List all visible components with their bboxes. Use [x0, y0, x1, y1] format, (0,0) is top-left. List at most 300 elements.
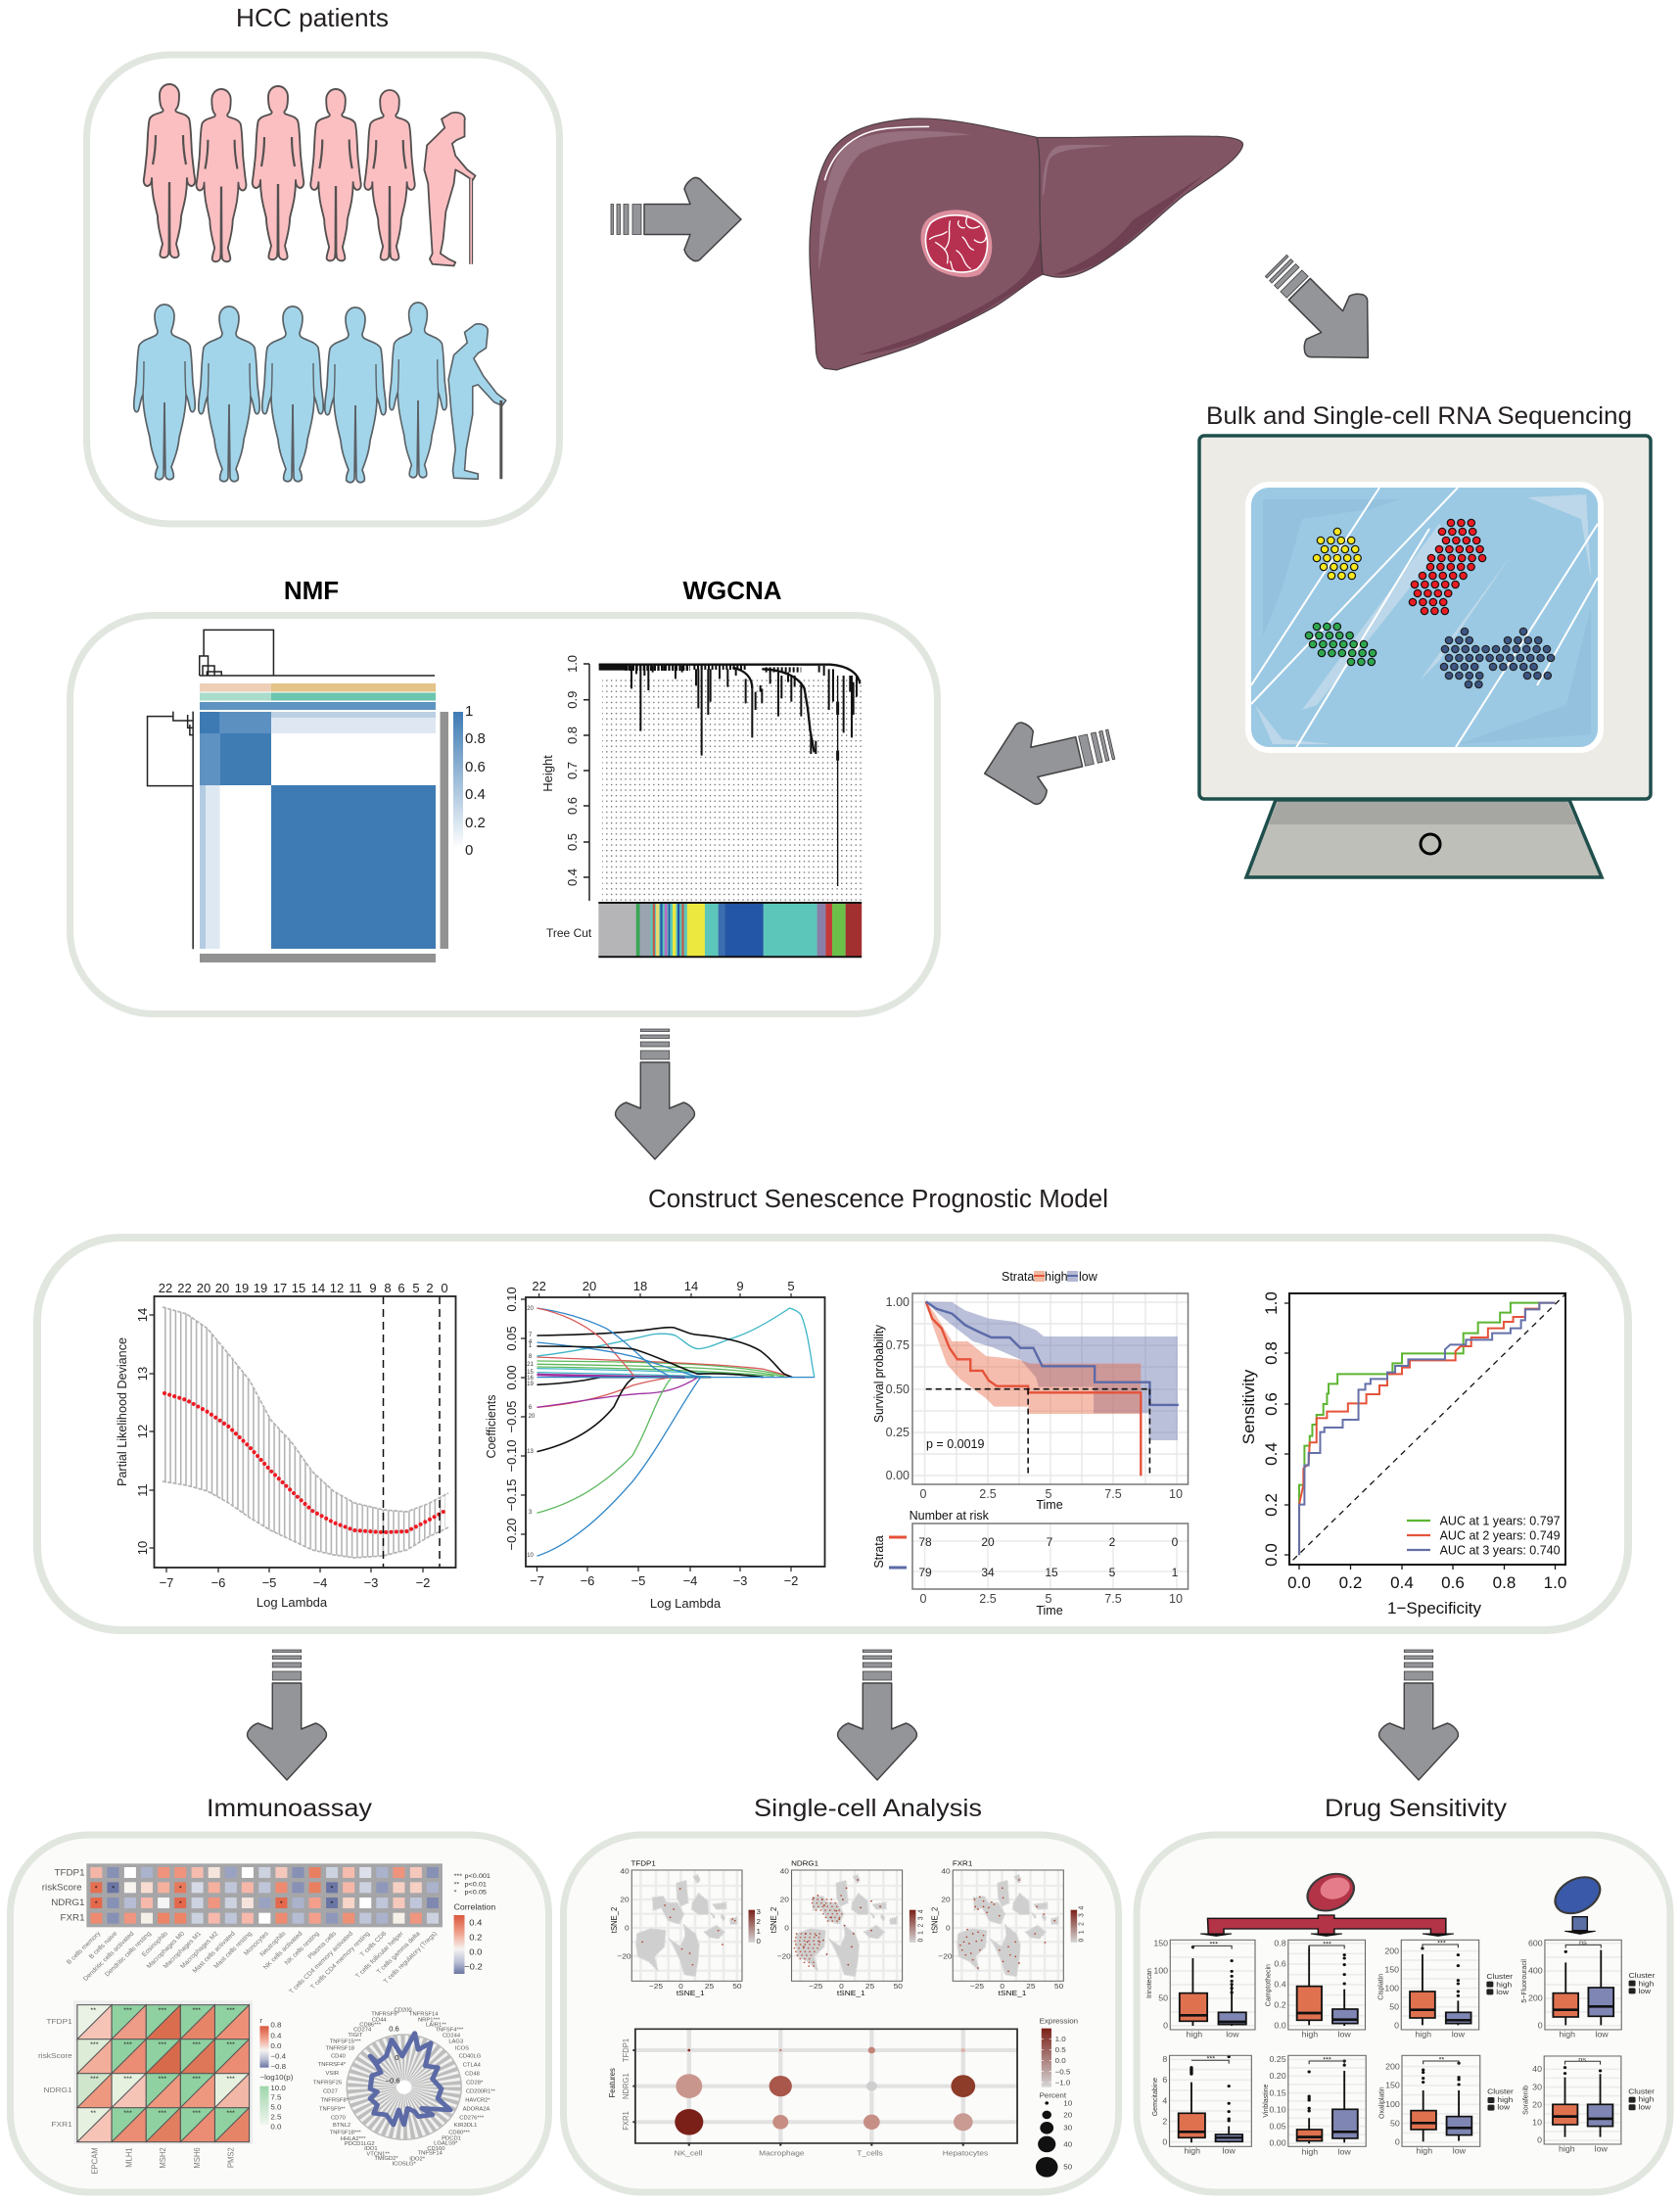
chart: immune checkpoint radar: 0.6 [389, 2025, 399, 2034]
chart: lasso coefficients: 0.00 [504, 1365, 519, 1390]
chart: partial likelihood deviance: −7 [160, 1575, 173, 1590]
chart: tSNE NDRG1: 4 [917, 1909, 924, 1913]
chart: Cisplatin boxplot: 100 [1384, 1984, 1399, 1992]
chart: tSNE NDRG1: 25 [865, 1982, 875, 1991]
legend: AUC values [1407, 1514, 1561, 1557]
chart: partial likelihood deviance: 12 [135, 1425, 150, 1438]
table: number at risk: 20 [981, 1535, 995, 1549]
chart: dot plot of features by cell type: NK_cell [675, 2149, 703, 2157]
chart: Camptothecin boxplot: high [1302, 2030, 1319, 2039]
chart: correlation triangle grid: TFDP1 [46, 2017, 72, 2026]
legend: r and -log10(p): 0.0 [270, 2123, 281, 2131]
chart: Sorafenib boxplot: 20 [1532, 2100, 1542, 2109]
chart: lasso coefficients: 13 [527, 1449, 534, 1455]
chart: Camptothecin boxplot: 0.6 [1274, 1959, 1286, 1969]
chart: Sorafenib boxplot: 40 [1532, 2064, 1542, 2074]
heading: Immunoassay: Immunoassay [207, 1795, 373, 1822]
legend: cluster: Cluster [1487, 2087, 1514, 2096]
chart: Kaplan-Meier survival: 0 [920, 1487, 927, 1501]
chart: ROC curves: 0.8 [1493, 1573, 1516, 1592]
chart: Oxaliplatin boxplot: 150 [1385, 2081, 1400, 2090]
chart: correlation triangle grid: *** [226, 2041, 235, 2048]
chart: immune cell correlation heatmap: T cells CD8 [359, 1931, 389, 1958]
chart: 5-Fluorouracil boxplot [1519, 1939, 1621, 2039]
chart: tSNE TFDP1: 1 [757, 1927, 761, 1936]
chart: partial likelihood deviance: −4 [313, 1575, 327, 1590]
chart: immune checkpoint radar: LAIR1** [426, 2022, 447, 2028]
chart: immune cell correlation heatmap: T cells CD4 memory activated [288, 1931, 354, 1995]
chart: 5-Fluorouracil boxplot: 0 [1538, 2021, 1543, 2031]
chart: lasso coefficients: 1 [529, 1343, 533, 1349]
chart: immune checkpoint radar: CD40 [331, 2054, 346, 2060]
chart: Gemcitabine boxplot: high [1184, 2146, 1200, 2155]
chart: 5-Fluorouracil boxplot: 600 [1528, 1939, 1543, 1947]
legend: significance and correlation: 0.2 [469, 1933, 482, 1942]
chart: Oxaliplatin boxplot: Oxaliplatin [1377, 2086, 1386, 2119]
chart: Kaplan-Meier survival: 0.25 [886, 1426, 910, 1439]
chart: tSNE TFDP1: 50 [732, 1982, 742, 1991]
chart: tSNE TFDP1 [610, 1859, 761, 1997]
chart: Kaplan-Meier survival: 0.50 [886, 1383, 910, 1396]
panel: NMF and WGCNA [70, 615, 938, 1014]
chart: immune checkpoint radar: CD276*** [459, 2115, 485, 2121]
chart: Cisplatin boxplot: 150 [1384, 1965, 1399, 1974]
chart: Cisplatin boxplot [1376, 1940, 1479, 2039]
chart: dot plot of features by cell type: FXR1 [622, 2111, 630, 2131]
chart: immune cell correlation heatmap: T cells CD4 memory resting [309, 1931, 372, 1991]
chart: Vinblastine boxplot: 0.20 [1269, 2071, 1286, 2081]
chart: Kaplan-Meier survival: 1.00 [886, 1295, 910, 1309]
chart: NMF consensus heatmap [148, 630, 486, 962]
chart: lasso coefficients: −4 [683, 1573, 697, 1588]
male patients row [134, 303, 506, 483]
chart: tSNE FXR1: 2 [1078, 1922, 1085, 1926]
chart: Camptothecin boxplot: 0.2 [1274, 2000, 1286, 2010]
chart: lasso coefficients: −3 [733, 1573, 747, 1588]
legend: significance and correlation: Correlation [454, 1902, 496, 1912]
chart: Sorafenib boxplot: high [1559, 2144, 1575, 2153]
chart: Gemcitabine boxplot: 8 [1162, 2054, 1168, 2064]
chart: 5-Fluorouracil boxplot: 5−Fluorouracil [1519, 1959, 1528, 2003]
chart: Kaplan-Meier survival: 2.5 [979, 1487, 997, 1501]
chart: immune cell correlation heatmap: Macrophages M1 [163, 1931, 204, 1970]
chart: immune checkpoint radar: VTCN1** [366, 2151, 391, 2157]
chart: partial likelihood deviance: 0 [441, 1281, 448, 1295]
legend: cluster [1487, 2087, 1514, 2112]
legend: cluster [1628, 2087, 1655, 2111]
chart: WGCNA dendrogram [540, 655, 862, 901]
legend: strata: low [1079, 1270, 1098, 1284]
chart: partial likelihood deviance [115, 1281, 456, 1610]
chart: immune checkpoint radar: CD80*** [448, 2131, 471, 2136]
chart: Gemcitabine boxplot: 6 [1162, 2075, 1168, 2085]
chart: lasso coefficients: −0.15 [504, 1479, 519, 1511]
chart: immune checkpoint radar: TNFRSF4* [318, 2062, 347, 2068]
chart: immune checkpoint radar: CD160 [427, 2146, 444, 2152]
title: Bulk and Single-cell RNA Sequencing: Bulk and Single-cell RNA Sequencing [1206, 402, 1632, 430]
arrow: to drug sensitivity [1379, 1650, 1458, 1780]
chart: immune checkpoint radar: CD48 [465, 2071, 480, 2077]
legend: cluster: high [1639, 1980, 1654, 1988]
chart: immune checkpoint radar: HHLA2*** [341, 2136, 366, 2142]
chart: tSNE NDRG1 [770, 1859, 924, 1997]
chart: lasso coefficients [485, 1279, 824, 1611]
legend: strata: high [1045, 1270, 1068, 1284]
chart: correlation triangle grid: *** [90, 2076, 99, 2083]
chart: dot plot of features by cell type: Macrophage [759, 2149, 805, 2157]
legend: r and -log10(p): 0.4 [270, 2032, 282, 2039]
legend: cluster: Cluster [1629, 1971, 1656, 1980]
chart: partial likelihood deviance: −3 [364, 1575, 378, 1590]
chart: Camptothecin boxplot: low [1338, 2030, 1352, 2039]
chart: tSNE NDRG1: 2 [917, 1924, 924, 1928]
chart: lasso coefficients: 19 [527, 1382, 534, 1387]
chart: partial likelihood deviance: 15 [292, 1281, 305, 1295]
table: number at risk: 79 [918, 1566, 932, 1579]
chart: immune checkpoint radar: CD28* [466, 2080, 484, 2086]
chart: Camptothecin boxplot: 0.8 [1274, 1939, 1286, 1947]
chart: NMF consensus heatmap: 1 [465, 703, 473, 720]
green cell cluster [1309, 627, 1381, 662]
legend: significance and correlation [454, 1873, 496, 1974]
chart: Vinblastine boxplot: *** [1323, 2057, 1331, 2063]
chart: correlation triangle grid: *** [192, 2007, 201, 2014]
table: number at risk: 2 [1109, 1535, 1116, 1549]
table: number at risk: 10 [1169, 1592, 1183, 1606]
chart: WGCNA tree cut colour strip: Tree Cut [546, 926, 592, 940]
panel: prognostic model [37, 1238, 1628, 1630]
chart: immune checkpoint radar: CD27 [323, 2088, 338, 2094]
chart: lasso coefficients: 7 [529, 1333, 533, 1338]
chart: immune checkpoint radar: TNFSF9** [319, 2107, 346, 2113]
chart: partial likelihood deviance: −5 [262, 1575, 276, 1590]
chart: correlation triangle grid: *** [192, 2110, 201, 2117]
chart: correlation triangle grid: MSH6 [193, 2147, 202, 2169]
chart: dot plot of features by cell type: Hepatocytes [943, 2149, 988, 2157]
legend: expression and percent: 0.5 [1055, 2045, 1066, 2054]
chart: immune checkpoint radar: TNFRSF14 [409, 2012, 438, 2018]
icon: low-risk blue cell with arrow [1548, 1870, 1608, 1934]
chart: Sorafenib boxplot: Sorafenib [1520, 2086, 1529, 2115]
chart: WGCNA dendrogram: Height [540, 755, 555, 792]
chart: 5-Fluorouracil boxplot: 200 [1528, 1993, 1543, 2003]
chart: partial likelihood deviance: 20 [215, 1281, 229, 1295]
chart: Gemcitabine boxplot: Gemcitabine [1150, 2078, 1159, 2116]
chart: WGCNA dendrogram: 0.7 [565, 762, 580, 779]
chart: immune cell correlation heatmap: Mast cells resting [212, 1931, 254, 1970]
chart: lasso coefficients: Coefficients [485, 1394, 498, 1459]
chart: tSNE NDRG1: 0 [917, 1939, 924, 1943]
chart: partial likelihood deviance: 14 [311, 1281, 325, 1295]
legend: cluster: low [1496, 1988, 1509, 1996]
chart: dot plot of features by cell type [608, 2017, 1078, 2178]
chart: immune cell correlation heatmap: T cells follicular helper [354, 1930, 405, 1980]
chart: lasso coefficients: −0.10 [504, 1440, 519, 1472]
chart: tSNE FXR1: tSNE_1 [999, 1989, 1027, 1997]
chart: immune checkpoint radar: −0.6 [386, 2077, 400, 2086]
chart: ROC curves [1239, 1291, 1566, 1617]
chart: ROC curves: 0.6 [1262, 1392, 1281, 1416]
chart: immune cell correlation heatmap: * [330, 1900, 334, 1907]
table: number at risk: 78 [918, 1535, 932, 1549]
chart: partial likelihood deviance: 9 [369, 1281, 377, 1295]
chart: lasso coefficients: 14 [684, 1279, 698, 1293]
legend: AUC values: AUC at 2 years: 0.749 [1440, 1529, 1561, 1543]
chart: tSNE NDRG1: 0 [839, 1982, 844, 1991]
chart: tSNE NDRG1: tSNE_2 [770, 1906, 778, 1933]
legend: r and -log10(p): −0.8 [270, 2062, 286, 2071]
chart: partial likelihood deviance: −6 [211, 1575, 225, 1590]
legend: expression and percent: 40 [1063, 2140, 1072, 2148]
chart: tSNE NDRG1: tSNE_1 [837, 1989, 865, 1997]
chart: partial likelihood deviance: 19 [235, 1281, 249, 1295]
chart: tSNE FXR1 [930, 1859, 1085, 1997]
chart: tSNE FXR1: −20 [938, 1952, 953, 1960]
heading: NMF: NMF [284, 576, 339, 605]
monitor stand [1246, 800, 1602, 877]
chart: WGCNA dendrogram: 0.8 [565, 727, 580, 744]
chart: immune cell correlation heatmap: NK cells resting [284, 1931, 321, 1966]
chart: immune checkpoint radar: TMIGD2* [374, 2156, 398, 2162]
chart: tSNE TFDP1: 0 [678, 1982, 683, 1991]
chart: WGCNA dendrogram: 1.0 [565, 655, 580, 673]
chart: correlation triangle grid: *** [123, 2110, 132, 2117]
chart: lasso coefficients: −0.20 [504, 1519, 519, 1550]
table: number at risk [872, 1509, 1189, 1617]
chart: WGCNA dendrogram: 0.5 [565, 833, 580, 851]
chart: partial likelihood deviance: 20 [197, 1281, 210, 1295]
chart: tSNE TFDP1: TFDP1 [631, 1859, 656, 1868]
chart: tSNE TFDP1: −25 [649, 1982, 664, 1991]
chart: Camptothecin boxplot [1263, 1939, 1365, 2039]
chart: Gemcitabine boxplot: 4 [1162, 2096, 1168, 2105]
chart: immune checkpoint radar: VSIR [325, 2071, 339, 2077]
chart: tSNE TFDP1: tSNE_1 [677, 1989, 705, 1997]
chart: immune checkpoint radar: BTNL2 [333, 2123, 350, 2129]
chart: correlation triangle grid: *** [123, 2007, 132, 2014]
chart: tSNE FXR1: 20 [941, 1896, 951, 1904]
legend: significance and correlation: *** [454, 1873, 462, 1880]
icon: computer monitor with single-cell clusters [1199, 436, 1651, 877]
chart: immune checkpoint radar: ICOSLG* [393, 2161, 417, 2167]
chart: immune checkpoint radar: CD40LG [459, 2054, 481, 2060]
chart: tSNE FXR1: 0 [946, 1924, 951, 1933]
legend: r and -log10(p): −0.4 [270, 2052, 287, 2060]
chart: immune cell correlation heatmap: * [179, 1886, 182, 1892]
chart: correlation triangle grid: FXR1 [51, 2120, 72, 2129]
chart: correlation triangle grid: MLH1 [124, 2147, 134, 2168]
chart: immune checkpoint radar: ICOS [455, 2045, 469, 2051]
legend: significance and correlation: p<0.05 [464, 1890, 487, 1896]
chart: correlation triangle grid [38, 2000, 294, 2175]
chart: Gemcitabine boxplot [1150, 2054, 1251, 2155]
legend: expression and percent: 30 [1063, 2124, 1072, 2132]
chart: partial likelihood deviance: 8 [384, 1281, 392, 1295]
chart: partial likelihood deviance: 22 [159, 1281, 172, 1295]
chart: immune cell correlation heatmap: Mast cells activated [192, 1931, 237, 1975]
legend: expression and percent: 50 [1063, 2163, 1072, 2172]
chart: Kaplan-Meier survival [872, 1270, 1189, 1617]
chart: Vinblastine boxplot: high [1302, 2147, 1319, 2156]
chart: Irinotecan boxplot: 100 [1153, 1966, 1168, 1976]
chart: lasso coefficients: 15 [527, 1370, 534, 1376]
title: Construct Senescence Prognostic Model: Construct Senescence Prognostic Model [648, 1186, 1108, 1213]
panel: immunoassay [10, 1835, 548, 2192]
chart: tSNE FXR1: 0 [1000, 1982, 1005, 1991]
legend: cluster: Cluster [1628, 2087, 1655, 2095]
chart: partial likelihood deviance: 5 [412, 1281, 420, 1295]
chart: Oxaliplatin boxplot: 50 [1390, 2119, 1400, 2128]
table: number at risk: 0 [920, 1592, 927, 1606]
chart: Gemcitabine boxplot: low [1223, 2146, 1237, 2155]
yellow cell cluster [1317, 532, 1367, 576]
legend: r and -log10(p): 0.0 [270, 2041, 281, 2050]
chart: ROC curves: 0.2 [1339, 1573, 1362, 1592]
chart: Cisplatin boxplot: Cisplatin [1376, 1974, 1385, 2000]
chart: Oxaliplatin boxplot: low [1453, 2146, 1467, 2155]
chart: Cisplatin boxplot: *** [1437, 1941, 1446, 1946]
chart: Oxaliplatin boxplot: 100 [1385, 2099, 1400, 2109]
chart: tSNE FXR1: 3 [1078, 1913, 1085, 1917]
legend: r and -log10(p): 10.0 [270, 2084, 286, 2092]
table: number at risk: 5 [1109, 1566, 1116, 1579]
female patients row [144, 84, 476, 266]
chart: NMF consensus heatmap: 0.4 [465, 786, 486, 803]
chart: ROC curves: 0.2 [1262, 1493, 1281, 1517]
chart: Sorafenib boxplot: low [1595, 2144, 1609, 2153]
legend: significance and correlation: −0.2 [464, 1962, 483, 1972]
chart: Vinblastine boxplot: 0.15 [1269, 2088, 1286, 2097]
chart: lasso coefficients: −2 [784, 1573, 798, 1588]
chart: Oxaliplatin boxplot: high [1416, 2146, 1432, 2155]
chart: tSNE NDRG1: −20 [777, 1952, 791, 1960]
chart: immune checkpoint radar: LGALS9* [434, 2141, 458, 2147]
chart: immune checkpoint radar: CTLA4 [463, 2062, 481, 2068]
legend: cluster: low [1639, 2103, 1651, 2111]
chart: Vinblastine boxplot: Vinblastine [1261, 2085, 1270, 2118]
chart: NMF consensus heatmap: 0.8 [465, 730, 486, 747]
chart: lasso coefficients: 9 [736, 1279, 744, 1293]
chart: tSNE NDRG1: NDRG1 [791, 1859, 818, 1868]
legend: cluster: low [1639, 1987, 1651, 1995]
chart: immune checkpoint radar: TNFRSF18 [326, 2045, 354, 2051]
chart: lasso coefficients: 0.10 [504, 1287, 519, 1312]
chart: Kaplan-Meier survival: Survival probability [872, 1324, 886, 1423]
table: number at risk: Time [1036, 1604, 1063, 1617]
chart: Vinblastine boxplot: 0.25 [1269, 2054, 1286, 2064]
chart: immune checkpoint radar [313, 2008, 496, 2167]
chart: immune cell correlation heatmap [42, 1863, 496, 1995]
chart: lasso coefficients: 0.05 [504, 1326, 519, 1351]
chart: immune cell correlation heatmap: * [280, 1900, 283, 1907]
chart: immune checkpoint radar: IDO1 [364, 2146, 378, 2152]
chart: correlation triangle grid: *** [159, 2007, 166, 2014]
chart: lasso coefficients: 16 [527, 1376, 534, 1382]
chart: immune checkpoint radar: KIR3DL1 [454, 2123, 477, 2129]
chart: Irinotecan boxplot: low [1226, 2030, 1239, 2039]
chart: immune checkpoint radar: CD200R1** [466, 2088, 496, 2094]
chart: immune cell correlation heatmap: Dendritic cells resting [104, 1931, 153, 1978]
legend: cluster: high [1497, 2095, 1513, 2104]
chart: Camptothecin boxplot: *** [1323, 1942, 1331, 1947]
chart: lasso coefficients: 21 [527, 1362, 534, 1368]
panel: single-cell analysis [564, 1835, 1118, 2192]
icon: liver with tumour [810, 118, 1243, 370]
chart: correlation triangle grid: EPCAM [90, 2147, 99, 2175]
chart: tSNE NDRG1: 1 [917, 1931, 924, 1935]
legend: cluster [1629, 1971, 1656, 1995]
arrow: to single-cell analysis [838, 1650, 916, 1780]
chart: lasso coefficients: 18 [633, 1279, 647, 1293]
chart: Vinblastine boxplot [1261, 2054, 1366, 2156]
chart: WGCNA tree cut colour strip [546, 903, 862, 957]
table: number at risk: 0 [1172, 1535, 1179, 1549]
chart: correlation triangle grid: *** [123, 2041, 132, 2048]
chart: immune checkpoint radar: PDCD1LG2 [345, 2141, 375, 2147]
chart: lasso coefficients: 5 [787, 1279, 795, 1293]
chart: immune checkpoint radar: PDCD1 [442, 2136, 461, 2142]
chart: tSNE FXR1: tSNE_2 [930, 1906, 940, 1933]
chart: correlation triangle grid: *** [192, 2041, 201, 2048]
table: number at risk: 5 [1046, 1592, 1052, 1606]
chart: Irinotecan boxplot: 0 [1163, 2021, 1168, 2031]
chart: immune checkpoint radar: TNFSF18*** [330, 2131, 362, 2136]
heading: WGCNA: WGCNA [682, 576, 782, 605]
chart: immune checkpoint radar: HAVCR2* [465, 2098, 491, 2104]
panel: drug sensitivity [1137, 1835, 1670, 2192]
chart: immune cell correlation heatmap: TFDP1 [54, 1867, 85, 1877]
panel: patients [86, 55, 560, 524]
legend: significance and correlation: ** [454, 1882, 460, 1888]
chart: immune checkpoint radar: TNFSF14 [418, 2150, 443, 2156]
chart: NMF consensus heatmap: 0.2 [465, 815, 486, 831]
chart: partial likelihood deviance: −2 [416, 1575, 430, 1590]
legend: cluster: low [1497, 2103, 1510, 2112]
chart: tSNE FXR1: 1 [1078, 1930, 1085, 1934]
navy cell cluster [1444, 632, 1558, 684]
legend: significance and correlation: 0.4 [469, 1918, 482, 1928]
legend: strata: Strata [1002, 1270, 1034, 1284]
legend: expression and percent [1036, 2017, 1078, 2178]
arrow: patients to liver [611, 177, 741, 261]
chart: tSNE NDRG1: 3 [917, 1916, 924, 1920]
chart: correlation triangle grid: *** [226, 2007, 235, 2014]
chart: immune cell correlation heatmap: * [330, 1886, 334, 1892]
chart: Camptothecin boxplot: 0.0 [1274, 2021, 1286, 2031]
legend: expression and percent: 20 [1063, 2111, 1072, 2119]
legend: r and -log10(p): 0.8 [270, 2021, 281, 2030]
table: number at risk: 2.5 [979, 1592, 997, 1606]
chart: immune checkpoint radar: NRP1*** [418, 2017, 441, 2023]
chart: Oxaliplatin boxplot: 200 [1385, 2062, 1400, 2071]
chart: WGCNA dendrogram: 0.6 [565, 797, 580, 815]
legend: r and -log10(p) [259, 2016, 294, 2131]
chart: immune cell correlation heatmap: T cells gamma delta [376, 1931, 422, 1976]
chart: correlation triangle grid: *** [192, 2076, 201, 2083]
chart: immune checkpoint radar: IDO2* [409, 2156, 426, 2162]
chart: WGCNA dendrogram: 0.9 [565, 691, 580, 709]
chart: immune cell correlation heatmap: * [95, 1886, 98, 1892]
chart: immune checkpoint radar: 0 [395, 2053, 399, 2062]
chart: Oxaliplatin boxplot [1377, 2055, 1480, 2155]
chart: immune cell correlation heatmap: Eosinophils [141, 1930, 170, 1958]
chart: immune checkpoint radar: TNFRSF25 [313, 2080, 342, 2086]
chart: Sorafenib boxplot: 0 [1537, 2135, 1542, 2145]
chart: Oxaliplatin boxplot: 0 [1395, 2137, 1400, 2147]
chart: Irinotecan boxplot: 150 [1153, 1939, 1168, 1948]
chart: immune cell correlation heatmap: Macrophages M0 [146, 1931, 186, 1970]
legend: expression and percent: 10 [1063, 2099, 1072, 2107]
